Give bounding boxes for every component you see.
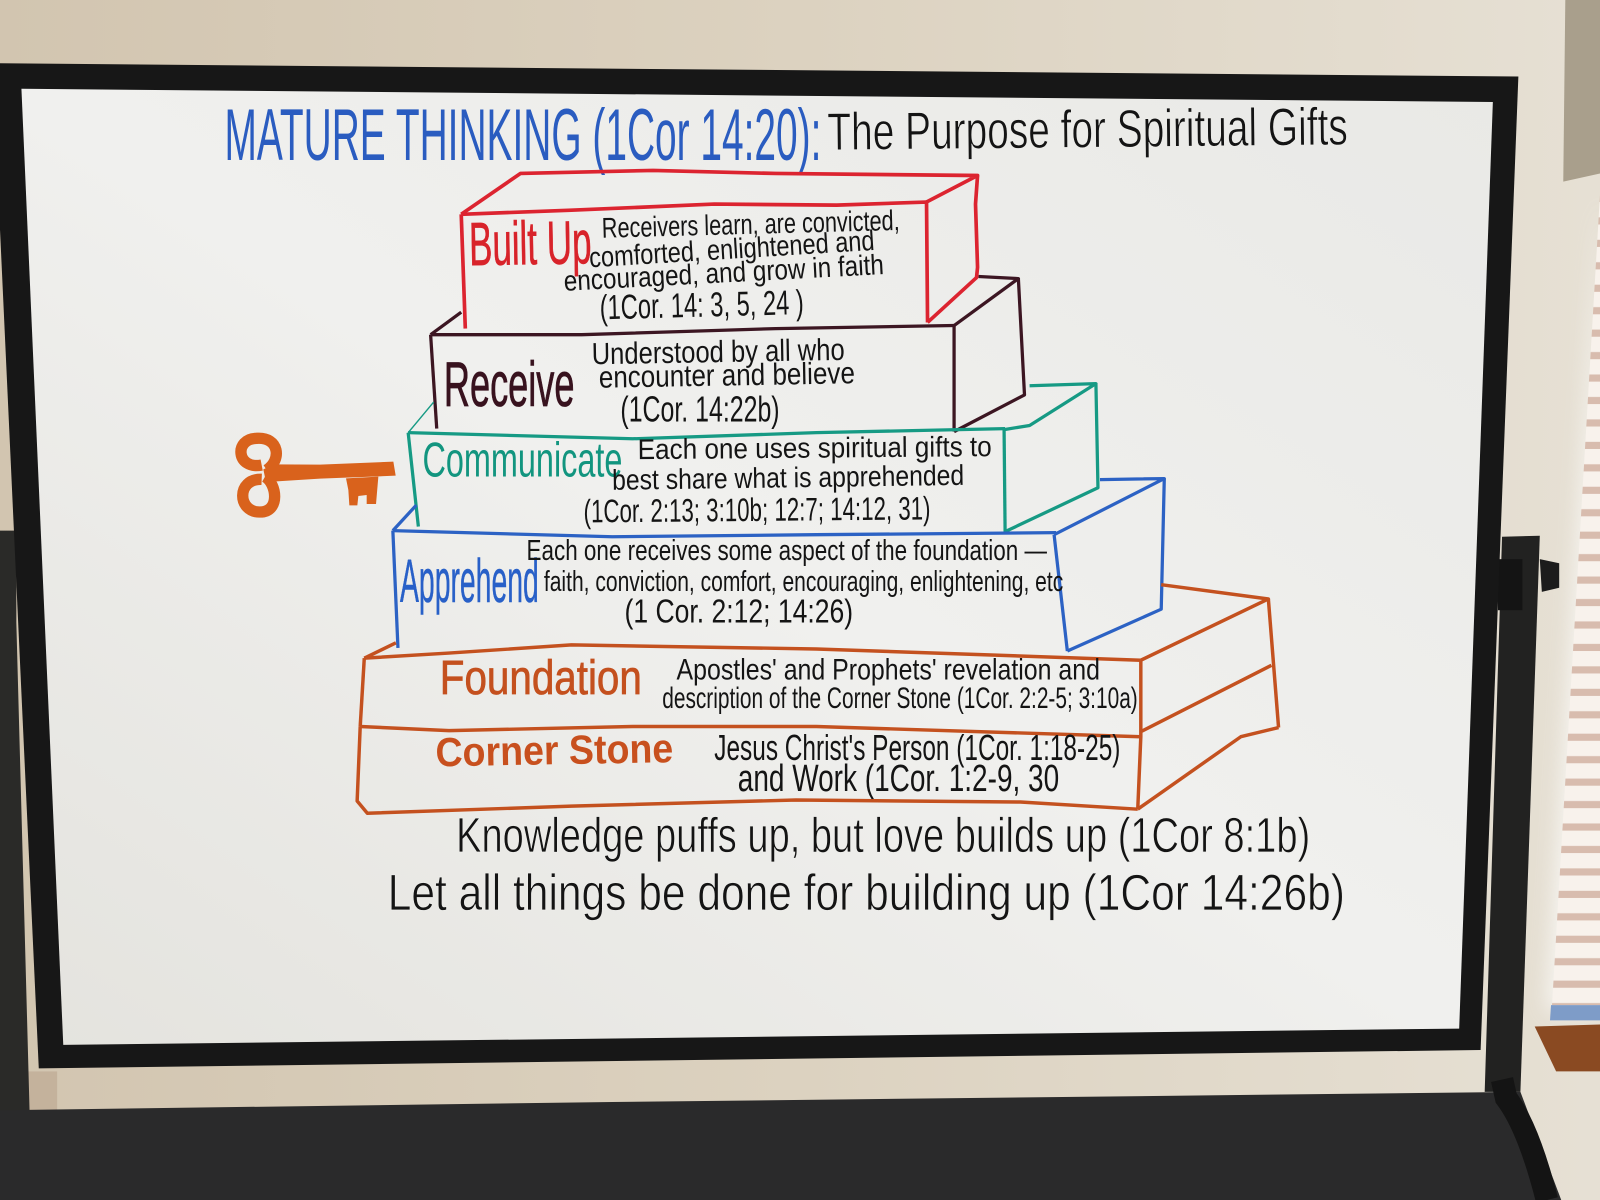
Corner Stone heading: Corner Stone	[435, 725, 674, 775]
Foundation description	[662, 654, 1138, 715]
Built Up description	[563, 205, 900, 327]
Communicate box outline	[408, 384, 1098, 532]
window glow	[1547, 195, 1600, 1010]
panel: Receive	[431, 277, 1024, 432]
title: The Purpose for Spiritual Gifts	[827, 98, 1348, 162]
panel: Apprehend	[393, 479, 1164, 651]
Corner Stone description	[714, 728, 1120, 799]
Built Up heading: Built Up	[468, 208, 592, 278]
Apprehend description: Each one receives some aspect of the foundation —	[527, 535, 1047, 567]
title: MATURE THINKING (1Cor 14:20):	[224, 93, 821, 176]
Receive description: Understood by all who	[591, 333, 845, 371]
right stand leg	[1502, 1080, 1547, 1200]
panel: Apprehend: Apprehend	[400, 547, 539, 615]
book spines on sill	[1550, 1005, 1600, 1020]
dark table	[0, 1092, 1561, 1200]
Receive heading: Receive	[444, 350, 574, 420]
Apprehend description: faith, conviction, comfort, encouraging, enlightening, etc	[544, 566, 1063, 598]
baseboard edge	[0, 1071, 57, 1112]
Apprehend description	[527, 535, 1063, 630]
Corner Stone description: and Work (1Cor. 1:2-9, 30	[738, 757, 1059, 799]
left stand post	[0, 531, 30, 1122]
panel: Corner Stone	[357, 660, 1279, 813]
Built Up description: (1Cor. 14: 3, 5, 24 )	[599, 284, 804, 327]
Foundation description: Apostles' and Prophets' revelation and	[677, 654, 1100, 687]
Receive box outline	[431, 277, 1024, 432]
Foundation heading: Foundation	[440, 652, 642, 705]
Apprehend box outline	[393, 479, 1164, 651]
wooden sill	[1535, 1024, 1600, 1071]
Built Up description: encouraged, and grow in faith	[563, 249, 885, 298]
Apprehend description: (1 Cor. 2:12; 14:26)	[624, 593, 853, 630]
Corner Stone description: Jesus Christ's Person (1Cor. 1:18-25)	[714, 728, 1120, 768]
Built Up description: comforted, enlightened and	[588, 225, 875, 274]
Built Up box outline	[461, 170, 978, 329]
Built Up description: Receivers learn, are convicted,	[601, 205, 900, 245]
Communicate description	[583, 431, 992, 529]
right stand post	[1485, 536, 1559, 1092]
Receive description: (1Cor. 14:22b)	[620, 389, 780, 429]
Receive description: encounter and believe	[599, 356, 855, 395]
Receive description	[591, 333, 855, 429]
Corner Stone box outline	[357, 660, 1279, 813]
window valance	[1563, 0, 1600, 182]
panel: Communicate	[408, 384, 1098, 532]
footer notes: Let all things be done for building up (1Cor 14:26b)	[388, 864, 1345, 921]
Communicate description: (1Cor. 2:13; 3:10b; 12:7; 14:12, 31)	[583, 489, 931, 529]
footer notes: Knowledge puffs up, but love builds up (1Cor 8:1b)	[456, 809, 1310, 863]
window blinds	[1552, 195, 1600, 1005]
footer notes	[388, 809, 1345, 921]
Foundation description: description of the Corner Stone (1Cor. 2:2-5; 3:10a)	[662, 682, 1138, 715]
key icon	[241, 438, 396, 512]
whiteboard surface	[21, 89, 1493, 1045]
Communicate description: Each one uses spiritual gifts to	[638, 431, 992, 466]
panel: Built Up	[461, 170, 978, 329]
Communicate description: best share what is apprehended	[612, 460, 964, 497]
Communicate heading: Communicate	[422, 434, 622, 488]
whiteboard frame	[0, 63, 1518, 1068]
panel: Foundation	[360, 585, 1279, 732]
Foundation box outline	[360, 585, 1279, 732]
